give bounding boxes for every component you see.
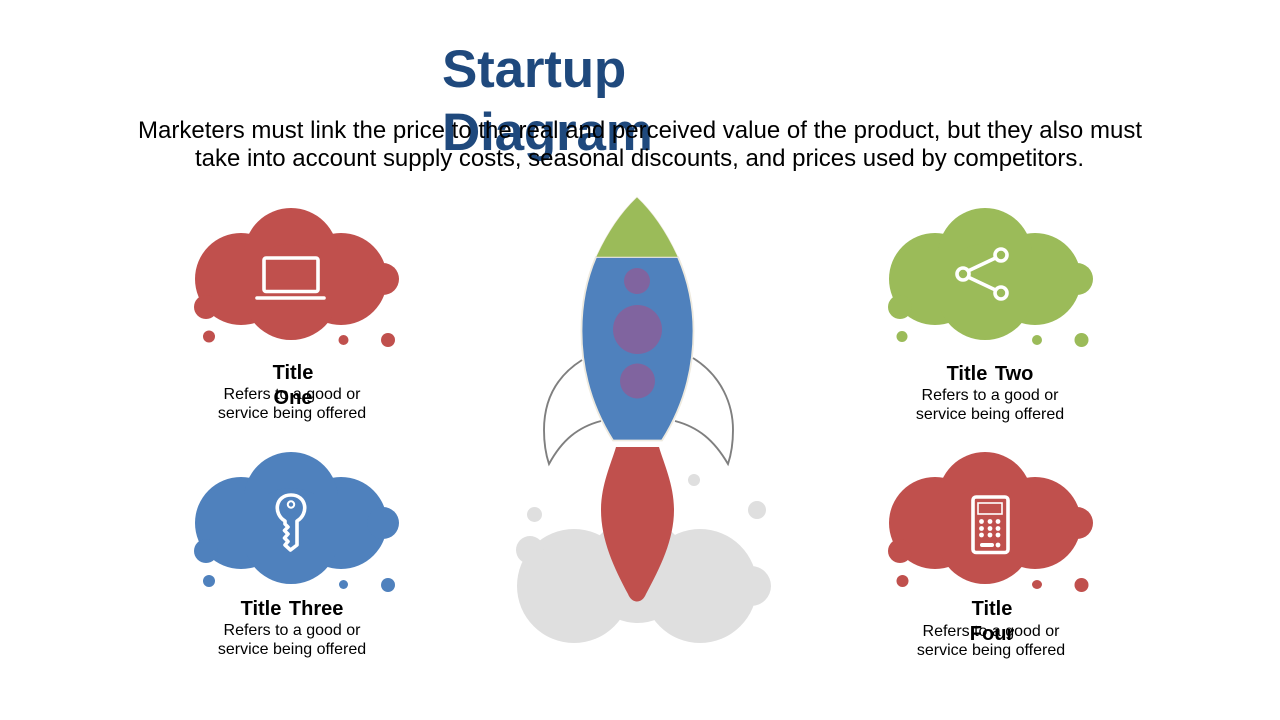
heading: title three: Title Three (241, 598, 343, 620)
heading: title one (273, 362, 313, 409)
panel: title four (888, 452, 1093, 659)
cloud two (888, 208, 1093, 347)
heading: title four: Title (972, 598, 1012, 620)
heading: title one: Title (273, 362, 313, 384)
heading: title one: One (274, 387, 312, 409)
description three (218, 622, 366, 658)
panel: title one (194, 208, 399, 422)
panel: title three (194, 452, 399, 658)
intro text: Marketers must link the price to the real and perceived value of the product, but they also must (138, 117, 1142, 144)
title (442, 40, 653, 162)
description four: service being offered (917, 642, 1065, 659)
icon: calculator (973, 497, 1008, 552)
heading: title four: Four (970, 623, 1014, 645)
description one (218, 386, 366, 422)
smoke cloud (516, 474, 771, 643)
description four: Refers to a good or (923, 623, 1060, 640)
title: Diagram (442, 103, 653, 162)
description two: service being offered (916, 406, 1064, 423)
icon: share (957, 249, 1007, 299)
porthole middle (613, 305, 662, 354)
description one: Refers to a good or (224, 386, 361, 403)
title: Startup (442, 40, 626, 99)
heading: title two: Title Two (947, 363, 1033, 385)
porthole bottom (620, 364, 655, 398)
icon: key (277, 495, 305, 550)
cloud one (194, 208, 399, 347)
porthole top (624, 268, 650, 294)
cloud three (194, 452, 399, 592)
flame (601, 447, 674, 602)
description two (916, 387, 1064, 423)
cloud four (888, 452, 1093, 592)
description two: Refers to a good or (922, 387, 1059, 404)
icon: laptop (257, 258, 324, 298)
intro text (138, 117, 1142, 172)
right fin (675, 358, 733, 464)
description four (917, 623, 1065, 659)
description three: service being offered (218, 641, 366, 658)
rocket body (582, 257, 694, 440)
left fin (544, 360, 601, 464)
description one: service being offered (218, 405, 366, 422)
intro text: take into account supply costs, seasonal discounts, and prices used by competitors. (195, 145, 1084, 172)
rocket nose (596, 197, 678, 257)
panel: title two (888, 208, 1093, 423)
description three: Refers to a good or (224, 622, 361, 639)
rocket illustration (516, 197, 771, 643)
heading: title four (970, 598, 1014, 645)
